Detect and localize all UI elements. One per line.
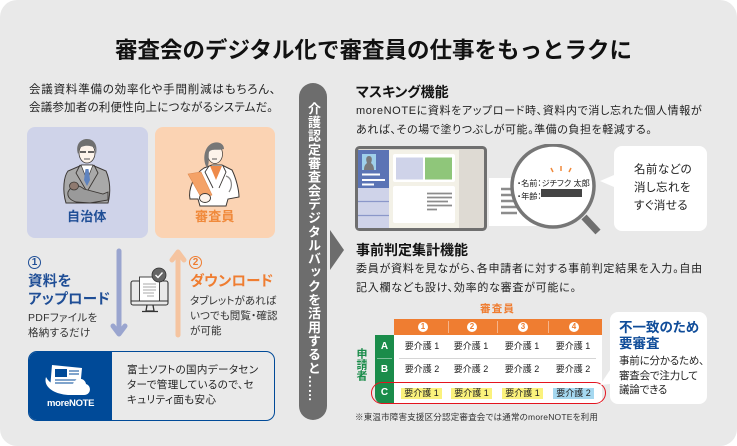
- text: が可能: [190, 325, 222, 337]
- table body: 要介護 2: [405, 364, 439, 374]
- label: 審査員 table header: 審査員: [480, 303, 515, 315]
- table body: 要介護 1: [454, 341, 488, 351]
- pill: vertical banner: [299, 83, 327, 420]
- table body: 要介護 2: [556, 388, 591, 398]
- row labels: C: [381, 387, 388, 398]
- text: いつでも閲覧・確認: [190, 310, 278, 322]
- table body: 要介護 1: [505, 341, 539, 351]
- pill: vertical banner: 介護認定審査会デジタルバックを活用すると……: [306, 102, 321, 402]
- table header: 1: [421, 322, 425, 331]
- table body: 要介護 1: [454, 388, 489, 398]
- number 2: 2: [193, 257, 198, 268]
- row labels: B: [381, 364, 388, 375]
- logo: moreNOTE: [28, 351, 112, 421]
- intro text: [29, 83, 276, 114]
- callout: erase mistakes: 消し忘れを: [634, 182, 691, 194]
- row labels: A: [381, 341, 388, 352]
- text: 格納するだけ: [28, 327, 91, 339]
- table body: 要介護 1: [505, 388, 540, 398]
- icon: monitor with checked document: [130, 268, 169, 312]
- text: キュリティ面も安心: [127, 394, 216, 406]
- section: pre-judgement: [356, 242, 703, 294]
- label: 申請者: 申請者: [355, 348, 367, 381]
- label: 自治体: 自治体: [67, 209, 107, 224]
- illustration: magnifier over document: [489, 144, 600, 234]
- section: masking: [356, 84, 702, 136]
- table header: 4: [572, 322, 576, 331]
- heading: 資料をアップロード: 資料を: [28, 274, 72, 290]
- intro text: 会議参加者の利便性向上につながるシステムだ。: [29, 102, 273, 114]
- text: 議論できる: [619, 384, 667, 396]
- heading: 不一致のため: [619, 320, 699, 335]
- table body: 要介護 1: [404, 388, 439, 398]
- table body: 要介護 2: [505, 364, 539, 374]
- illustration: tablet: [355, 146, 487, 231]
- table body: 要介護 1: [556, 341, 590, 351]
- text: PDFファイルを: [28, 312, 97, 324]
- text: [28, 312, 97, 339]
- table body: 要介護 2: [454, 364, 488, 374]
- text: 審査会で注力して: [619, 370, 698, 382]
- arrow: up: [170, 250, 186, 338]
- heading: 資料をアップロード: [28, 273, 110, 308]
- text: ターで管理しているので、セ: [127, 379, 254, 391]
- callout: erase mistakes: 名前などの: [634, 164, 692, 176]
- table header: 2: [470, 322, 474, 331]
- text: line 2: あれば、その場で塗りつぶしが可能。準備の負担を軽減する。: [356, 124, 652, 136]
- text: line 1: 委員が資料を見ながら、各申請者に対する事前判定結果を入力。自由: [356, 263, 703, 275]
- text: 事前に分かるため、: [619, 355, 704, 367]
- arrow: down: [110, 248, 128, 336]
- text: 富士ソフトの国内データセン: [127, 364, 259, 376]
- table header: 3: [521, 322, 525, 331]
- heading: [619, 320, 699, 351]
- step 2: download: [189, 256, 278, 337]
- heading: ダウンロード: ダウンロード: [190, 274, 273, 290]
- panel: moreNOTE data center: [28, 351, 275, 421]
- number 1: 1: [32, 257, 37, 268]
- label: 審査員: 審査員: [195, 209, 235, 224]
- panel: 審査員 card: [155, 127, 275, 238]
- text: age: ・年齢：: [517, 192, 542, 200]
- text: line 2: 記入欄なども設け、効率的な審査が可能に。: [356, 282, 577, 294]
- table body: 要介護 2: [556, 364, 590, 374]
- callout: erase mistakes: [600, 146, 707, 231]
- table body: [394, 335, 602, 403]
- heading: 事前判定集計機能: [356, 242, 468, 258]
- heading: マスキング機能: [356, 84, 449, 100]
- intro text: 会議資料準備の効率化や手間削減はもちろん、: [29, 84, 276, 96]
- table body: 要介護 1: [405, 341, 439, 351]
- text: [619, 355, 704, 396]
- highlight: red outline on row C: [371, 382, 606, 404]
- callout: mismatch needs review: [600, 312, 707, 404]
- table: pre-judgement results: [375, 319, 602, 404]
- text: タブレットがあれば: [190, 295, 276, 307]
- step 1: upload: [28, 256, 110, 339]
- text: line 1: moreNOTEに資料をアップロード時、資料内で消し忘れた個人情報が: [356, 105, 702, 117]
- title: 審査会のデジタル化で審査員の仕事をもっとラクに: [115, 38, 632, 63]
- heading: 資料をアップロード: アップロード: [28, 292, 110, 308]
- icon: man in suit: [63, 139, 110, 204]
- text: [127, 364, 259, 406]
- table header: [394, 319, 602, 335]
- arrow: right triangle: [330, 230, 344, 270]
- number 1: [28, 256, 41, 269]
- heading: 要審査: [619, 336, 660, 351]
- text: name: ・名前：ジチフク 太郎: [517, 178, 590, 188]
- footnote: ※東温市障害支援区分認定審査会では通常のmoreNOTEを利用: [355, 412, 598, 422]
- callout: erase mistakes: すぐ消せる: [634, 200, 688, 212]
- number 2: [189, 256, 202, 269]
- icon: woman in white coat with clipboard: [188, 142, 240, 206]
- logo: moreNOTE: moreNOTE: [47, 398, 94, 409]
- row labels: [375, 335, 394, 404]
- panel: 自治体 card: [27, 127, 148, 238]
- text: [190, 295, 278, 337]
